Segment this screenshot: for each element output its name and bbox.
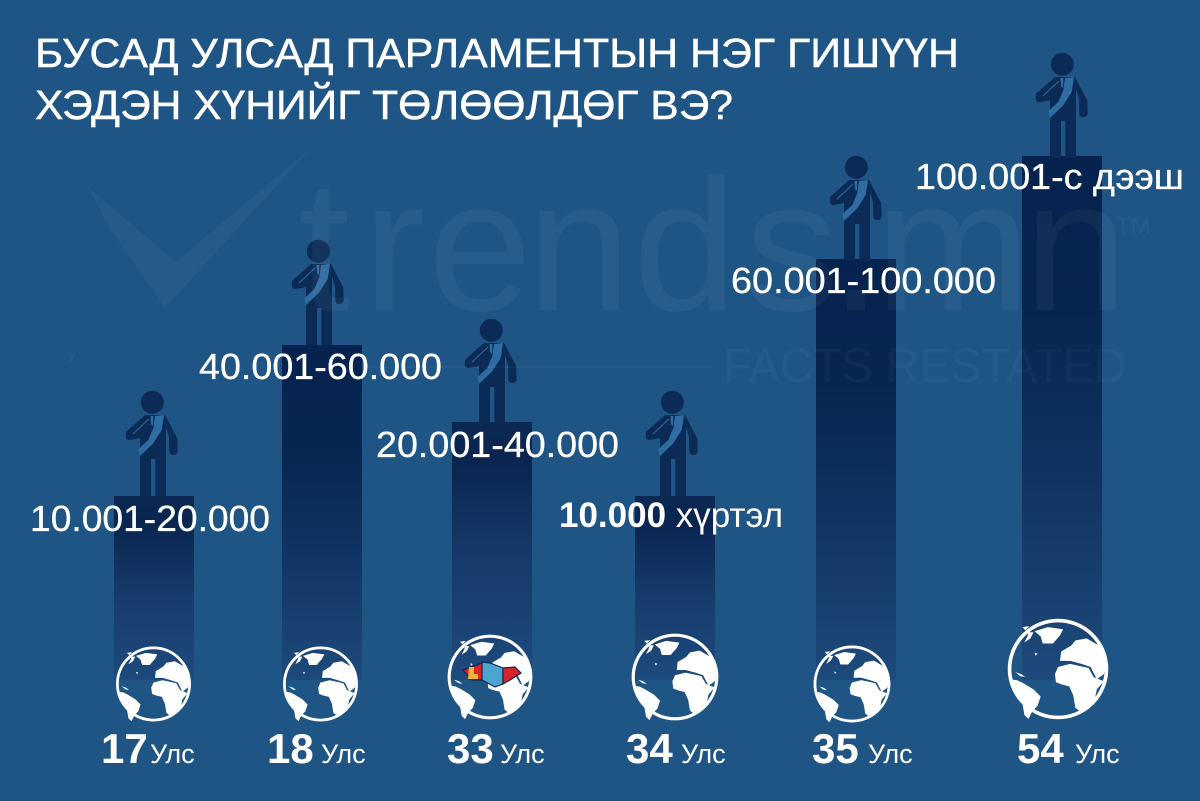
icon: person 4	[646, 391, 698, 496]
icon: person 1	[126, 391, 178, 496]
watermark wordmark: trends.mn	[298, 141, 1128, 350]
watermark trademark: TM	[1116, 213, 1151, 240]
group: 34 countries	[559, 496, 783, 772]
watermark tagline: FACTS RESTATED	[723, 340, 1127, 393]
count label: Улс	[681, 739, 726, 769]
group: 35 countries	[731, 260, 996, 772]
column: 10.001-20.000	[114, 496, 194, 680]
title line 2: ХЭДЭН ХҮНИЙГ ТӨЛӨӨЛДӨГ ВЭ?	[35, 82, 733, 128]
icon: person 2	[292, 240, 344, 345]
range label: 60.001-100.000	[731, 260, 996, 301]
icon: globe	[117, 648, 190, 721]
column: 20.001-40.000	[452, 422, 532, 680]
range label: 10.000 хүртэл	[559, 496, 783, 535]
watermark small tick	[67, 348, 77, 363]
watermark rule	[362, 366, 712, 368]
count label: 34	[626, 725, 673, 772]
icon: globe	[1010, 621, 1107, 719]
count label: 18	[267, 725, 314, 772]
count label: 33	[447, 725, 494, 772]
column: 60.001-100.000	[816, 259, 896, 680]
range label: 20.001-40.000	[376, 424, 619, 465]
title: БУСАД УЛСАД ПАРЛАМЕНТЫН НЭГ ГИШҮҮН	[35, 30, 959, 76]
count label: 35	[812, 725, 859, 772]
column: 100.001+	[1022, 156, 1102, 680]
watermark checkmark	[88, 147, 312, 308]
Mongolian flag map	[463, 662, 521, 687]
icon: globe with Mongolia	[449, 636, 531, 719]
icon: globe	[284, 648, 357, 721]
columns and persons layer	[114, 53, 1102, 680]
range label: 100.001-с дээш	[915, 156, 1184, 197]
count label: Улс	[868, 739, 913, 769]
group: 33 countries	[376, 424, 619, 772]
count label: Улс	[150, 739, 195, 769]
group: 17 countries	[30, 498, 270, 772]
icon: globe	[633, 635, 717, 720]
icon: globe	[815, 647, 889, 722]
count label: Улс	[500, 739, 545, 769]
count label: Улс	[321, 739, 366, 769]
range label: 10.001-20.000	[30, 498, 270, 539]
icon: person 3	[465, 319, 517, 424]
icon: person 5	[830, 156, 882, 261]
column: 10.000	[635, 496, 715, 680]
icon: person 6	[1036, 53, 1088, 158]
column: 40.001-60.000	[282, 345, 362, 680]
count label: 54	[1017, 725, 1064, 772]
count label: Улс	[1075, 739, 1120, 769]
group: 54 countries	[915, 156, 1184, 772]
range label: 40.001-60.000	[199, 346, 442, 387]
watermark logo	[67, 141, 1151, 393]
count label: 17	[101, 725, 148, 772]
group: 18 countries	[199, 346, 442, 772]
